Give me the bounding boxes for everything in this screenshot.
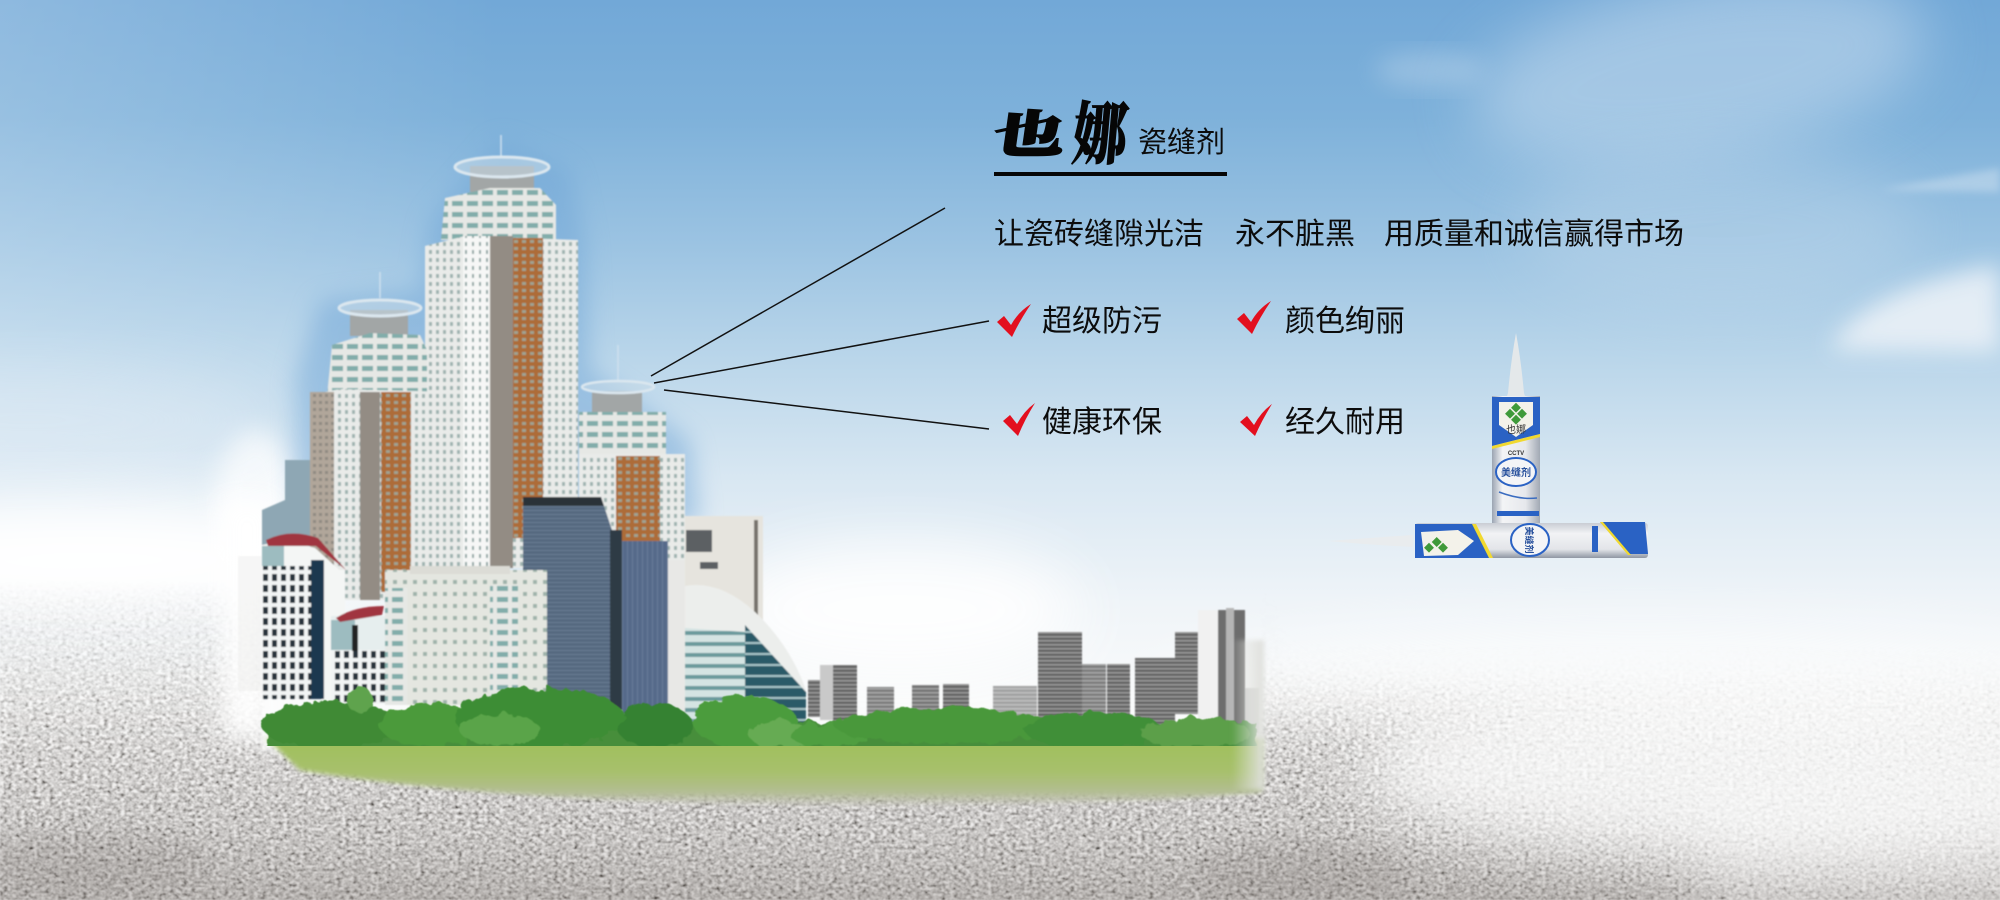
illustration: city skyline with towers, trees and lawn	[222, 135, 1264, 806]
background: gravel ground	[0, 594, 2000, 900]
title underline	[994, 172, 1227, 176]
blue halo behind towers	[295, 140, 700, 560]
lying tube: 美缝剂	[1524, 526, 1535, 554]
cream block	[385, 566, 547, 705]
lying tube	[1328, 522, 1648, 558]
leader lines	[651, 208, 989, 429]
product: sealant tubes	[1328, 333, 1648, 558]
brand title: 娜	[1069, 80, 1132, 178]
feature: 健康环保: 健康环保	[1042, 406, 1162, 439]
left tower	[310, 272, 449, 600]
upright tube: 也娜	[1506, 423, 1526, 436]
feature: 超级防污: 超级防污	[1042, 305, 1162, 338]
brand title	[990, 80, 1225, 178]
blue glass towers	[523, 497, 685, 720]
slogan	[994, 218, 1684, 251]
distant buildings	[808, 608, 1259, 743]
brand title: 瓷缝剂	[1138, 126, 1225, 159]
feature: 颜色绚丽	[1237, 301, 1405, 338]
curved glass building	[685, 585, 806, 726]
features	[997, 301, 1405, 439]
brand title: 也	[990, 94, 1071, 167]
feature: 经久耐用: 经久耐用	[1285, 406, 1405, 439]
right tower	[579, 345, 685, 664]
white halo at left edge of the picture	[222, 500, 272, 740]
upright tube: 美缝剂	[1501, 466, 1531, 479]
stepped back block	[262, 460, 310, 545]
lawn	[266, 738, 1262, 806]
upright tube: CCTV	[1508, 451, 1524, 457]
slogan: 永不脏黑	[1235, 218, 1355, 251]
feature: 颜色绚丽: 颜色绚丽	[1285, 305, 1405, 338]
right edge fade	[1232, 640, 1264, 790]
left office blocks	[262, 533, 385, 704]
slogan: 用质量和诚信赢得市场	[1384, 218, 1684, 251]
trees	[260, 684, 1258, 746]
beige block	[685, 516, 763, 626]
ghost block	[238, 556, 262, 691]
slogan: 让瓷砖缝隙光洁	[994, 218, 1204, 251]
feature: 健康环保	[1003, 403, 1162, 439]
tall tower	[425, 135, 578, 568]
feature: 经久耐用	[1240, 404, 1405, 439]
upright tube	[1492, 333, 1540, 523]
main towers	[262, 135, 806, 726]
